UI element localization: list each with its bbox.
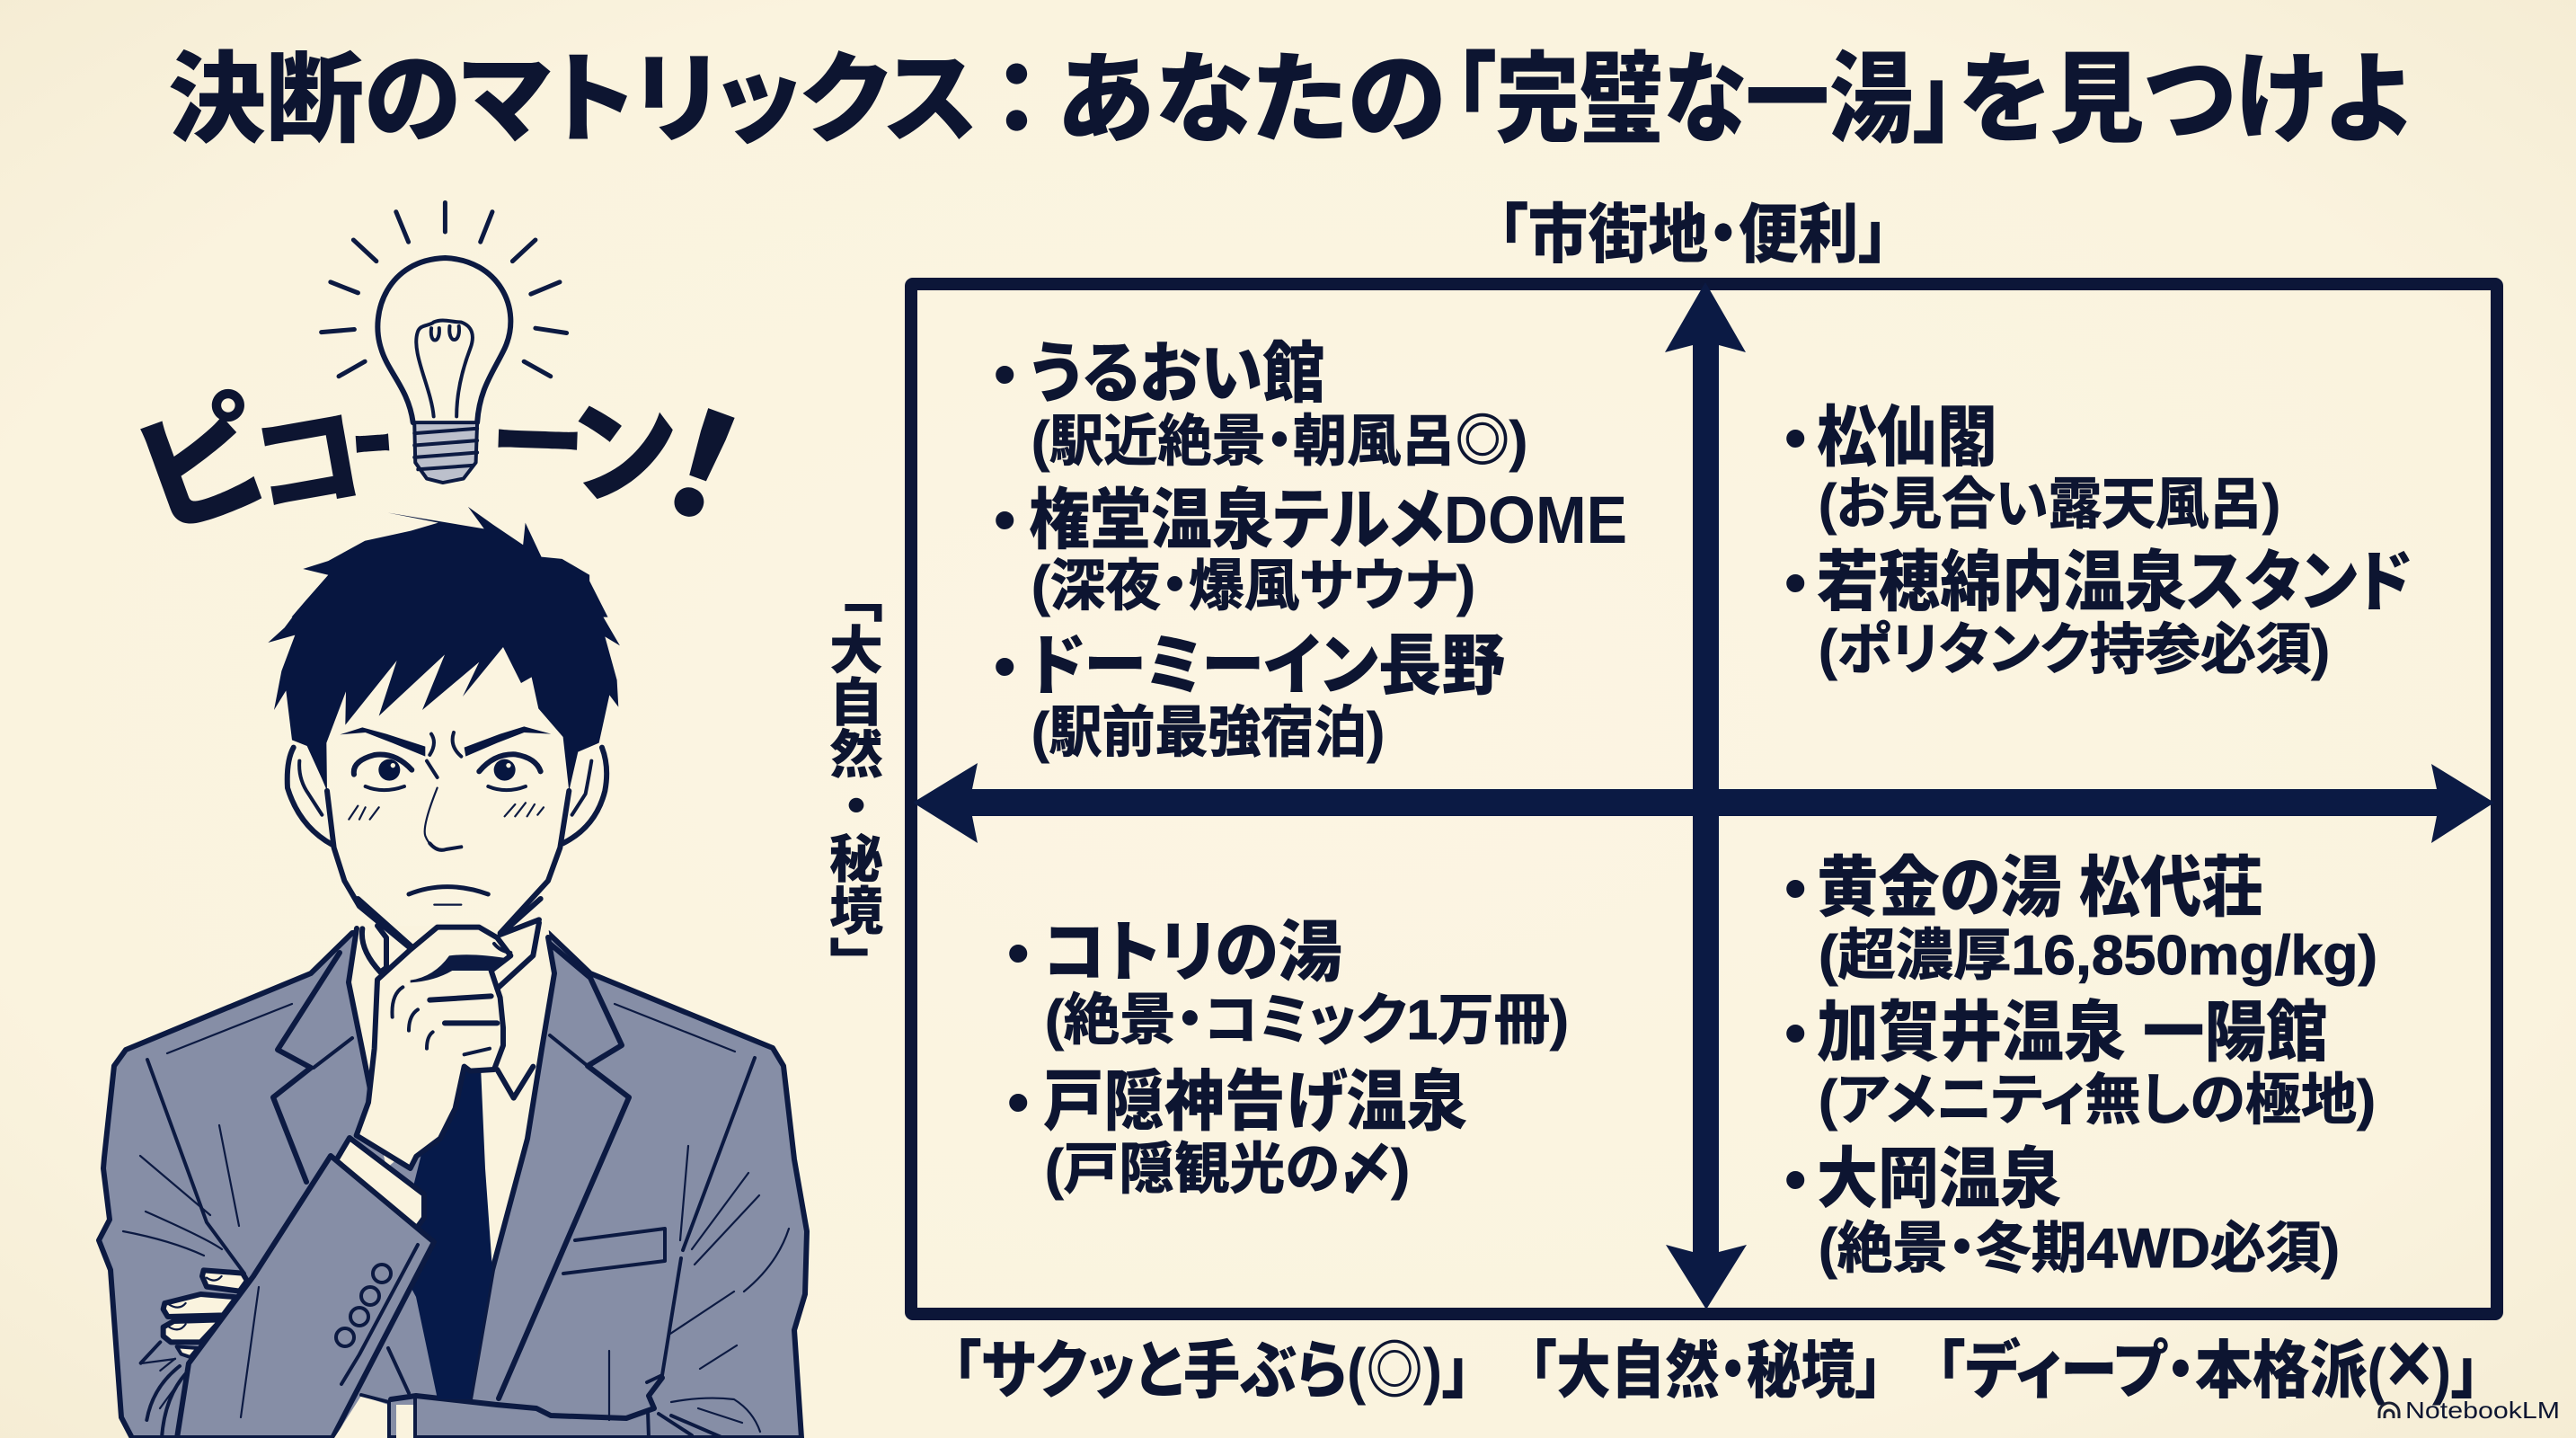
- title: を見つけよ: [1959, 45, 2410, 155]
- sound effect text: ー: [350, 396, 395, 499]
- item: うるおい館: (駅近絶景・朝風呂◎): [1031, 411, 1527, 473]
- quadrant: bottom left: [1007, 915, 1569, 1201]
- quadrant: top left: [994, 336, 1627, 764]
- matrix frame: [911, 284, 2497, 1314]
- item: うるおい館: [994, 336, 1527, 473]
- fist shadow: [411, 954, 509, 982]
- left lapel: [273, 953, 340, 1182]
- shirt visible below arm: [334, 1348, 415, 1438]
- sound effect text: ！: [641, 379, 763, 555]
- item: 若穂綿内温泉スタンド: 若穂綿内温泉スタンド: [1817, 545, 2412, 619]
- ears: [288, 748, 606, 845]
- quadrant: bottom right: [1784, 850, 2377, 1280]
- item: うるおい館: •: [994, 339, 1016, 409]
- blush lines: [349, 803, 544, 820]
- item: ドーミーイン長野: ドーミーイン長野: [1029, 628, 1505, 703]
- face outline: [327, 791, 569, 948]
- axis labels: bottom: 「サクッと手ぶら(◎)」: [952, 1336, 1471, 1406]
- illustration: thinking man with light bulb: [99, 202, 807, 1438]
- bottom arm edge: [391, 1378, 662, 1418]
- item: 松仙閣: [1784, 400, 2280, 536]
- lower hand fingers: [141, 1270, 247, 1438]
- axis labels: bottom: [952, 1315, 2480, 1411]
- sound effect text: [120, 377, 763, 556]
- item: うるおい館: うるおい館: [1030, 336, 1325, 411]
- collar: [362, 923, 539, 1098]
- raised hand on chin: [357, 899, 541, 1168]
- jacket front edges: [349, 928, 554, 1399]
- item: 権堂温泉テルメDOME: (深夜・爆風サウナ): [1031, 555, 1475, 617]
- item: 黄金の湯 松代荘: •: [1784, 853, 1807, 923]
- item: ドーミーイン長野: •: [994, 631, 1016, 701]
- shoulder lines and arm seams: [167, 1004, 735, 1053]
- item: 大岡温泉: •: [1784, 1144, 1807, 1214]
- sound effect text: コ: [245, 393, 372, 532]
- item: コトリの湯: (絶景・コミック1万冊): [1045, 990, 1569, 1052]
- item: 加賀井温泉 一陽館: (アメニティ無しの極地): [1819, 1070, 2376, 1132]
- axis labels: bottom: 「大自然・秘境」: [1529, 1336, 1882, 1406]
- item: 権堂温泉テルメDOME: [994, 483, 1627, 617]
- title: 決断のマトリックス: [168, 45, 978, 155]
- eyebrows: [340, 727, 425, 757]
- neck and jaw: [358, 899, 541, 946]
- watermark: NotebookLM: NotebookLM: [2405, 1397, 2560, 1424]
- item: 大岡温泉: 大岡温泉: [1817, 1141, 2061, 1216]
- item: コトリの湯: [1007, 915, 1569, 1052]
- title: ：: [992, 45, 1041, 155]
- light rays: [322, 202, 567, 377]
- filament: [416, 320, 473, 416]
- shirt: [349, 926, 554, 1270]
- title: [168, 45, 2410, 155]
- hair top: [291, 507, 608, 617]
- mouth and chin: [409, 887, 488, 894]
- sleeve buttons: [336, 1265, 391, 1346]
- axis label: top: 「市街地・便利」: [1498, 200, 1889, 271]
- item: ドーミーイン長野: (駅前最強宿泊): [1031, 702, 1385, 764]
- item: 大岡温泉: (絶景・冬期4WD必須): [1819, 1218, 2340, 1280]
- nose: [425, 788, 461, 849]
- item: コトリの湯: コトリの湯: [1043, 915, 1342, 990]
- item: 若穂綿内温泉スタンド: •: [1784, 547, 1807, 617]
- item: ドーミーイン長野: [994, 628, 1505, 764]
- shirt cuff: [335, 1138, 424, 1234]
- head: [268, 609, 620, 948]
- upper hair and bulb: [291, 202, 608, 617]
- item: 戸隠神告げ温泉: [1007, 1064, 1467, 1201]
- item: 戸隠神告げ温泉: •: [1007, 1067, 1030, 1137]
- item: 加賀井温泉 一陽館: •: [1784, 998, 1807, 1068]
- item: 大岡温泉: [1784, 1141, 2340, 1280]
- item: 黄金の湯 松代荘: [1784, 850, 2377, 987]
- item: 権堂温泉テルメDOME: 権堂温泉テルメDOME: [1029, 483, 1627, 557]
- eyes: [354, 754, 541, 775]
- item: 黄金の湯 松代荘: 黄金の湯 松代荘: [1817, 850, 2263, 925]
- sound effect text: ピ: [120, 377, 287, 556]
- necktie: [395, 1066, 492, 1399]
- item: 松仙閣: (お見合い露天風呂): [1819, 474, 2280, 536]
- folds: [123, 1125, 789, 1420]
- right lapel: [499, 944, 629, 1398]
- axis label: left vertical: 「大自然・秘境」: [821, 571, 882, 988]
- item: 加賀井温泉 一陽館: [1784, 995, 2376, 1132]
- item: 戸隠神告げ温泉: (戸隠観光の〆): [1045, 1139, 1410, 1201]
- item: 権堂温泉テルメDOME: •: [994, 484, 1016, 555]
- item: 戸隠神告げ温泉: 戸隠神告げ温泉: [1043, 1064, 1467, 1139]
- sound effect text: ン: [564, 380, 685, 520]
- crossed forearm sleeve: [177, 1156, 434, 1438]
- quadrant: top right: [1784, 400, 2412, 681]
- title: あなたの: [1057, 45, 1446, 155]
- bulb glass: [377, 258, 510, 422]
- item: コトリの湯: •: [1007, 918, 1030, 988]
- axis labels: bottom: 「ディープ・本格派(×)」: [1936, 1315, 2480, 1411]
- icon: light bulb: [322, 202, 567, 483]
- hair lower: [268, 609, 620, 791]
- horizontal axis arrow: [913, 763, 2494, 843]
- item: 加賀井温泉 一陽館: 加賀井温泉 一陽館: [1817, 995, 2328, 1070]
- item: 黄金の湯 松代荘: (超濃厚16,850mg/kg): [1819, 925, 2377, 987]
- bulb base: [414, 422, 477, 483]
- brow creases: [427, 732, 461, 777]
- title: 「完璧な一湯」: [1454, 45, 1955, 155]
- item: 松仙閣: •: [1784, 403, 1807, 473]
- jacket body: [99, 933, 807, 1438]
- pocket: [563, 1229, 665, 1274]
- item: 松仙閣: 松仙閣: [1817, 400, 1997, 475]
- item: 若穂綿内温泉スタンド: [1784, 545, 2412, 681]
- sound effect text: ー: [490, 389, 586, 499]
- suit jacket and shirt: [99, 926, 807, 1438]
- vertical axis arrow: [1665, 282, 1747, 1309]
- item: 若穂綿内温泉スタンド: (ポリタンク持参必須): [1819, 619, 2330, 681]
